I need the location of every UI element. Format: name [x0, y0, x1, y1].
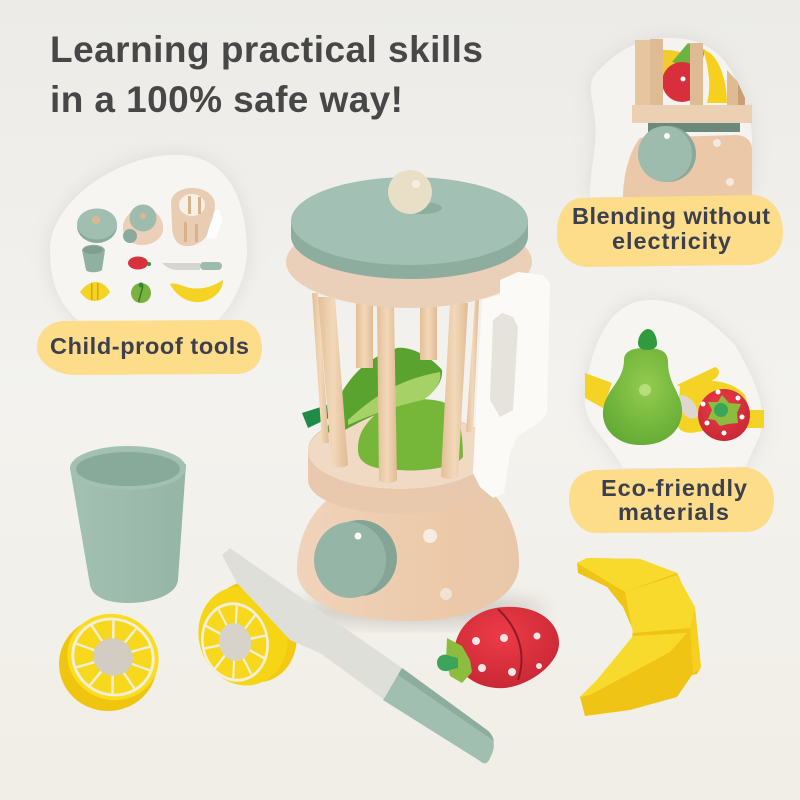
blender lid	[291, 177, 528, 279]
title: Learning practical skills	[50, 29, 483, 70]
shadow	[295, 596, 545, 624]
panel background blob	[585, 300, 762, 468]
icon: pear and fruit	[585, 329, 764, 445]
label: eco-friendly materials	[569, 467, 774, 533]
icon: toy parts layout	[77, 188, 223, 303]
icon: blender closeup	[623, 39, 752, 197]
main blender illustration	[286, 170, 550, 624]
blender rods	[312, 293, 479, 483]
blender dial	[314, 520, 397, 598]
label: blending without electricity	[557, 195, 783, 267]
panel: eco-friendly materials	[569, 300, 774, 533]
blender jar platform	[308, 412, 492, 514]
panel: blending without electricity	[557, 38, 783, 267]
strawberry	[437, 607, 559, 688]
knife	[222, 548, 494, 763]
fruit inside	[302, 348, 463, 470]
lemon half right	[186, 570, 310, 697]
blender top ring	[286, 216, 532, 308]
blender base	[297, 490, 519, 621]
panel background blob	[590, 38, 752, 197]
panel background blob	[50, 155, 247, 322]
title	[50, 29, 483, 120]
label: eco-friendly materials: Eco-friendly	[601, 475, 747, 501]
panel: child-proof tools	[37, 155, 262, 375]
banana	[577, 558, 701, 716]
cup	[70, 446, 186, 603]
label: eco-friendly materials: materials	[618, 499, 729, 525]
lemon half left	[55, 601, 171, 713]
label: child-proof tools: Child-proof tools	[50, 333, 249, 359]
blender handle	[473, 272, 550, 498]
label: blending without electricity: Blending without	[572, 203, 770, 229]
label: child-proof tools	[37, 320, 262, 375]
lid knob	[388, 170, 442, 214]
label: blending without electricity: electricity	[612, 228, 731, 254]
title: in a 100% safe way!	[50, 79, 403, 120]
